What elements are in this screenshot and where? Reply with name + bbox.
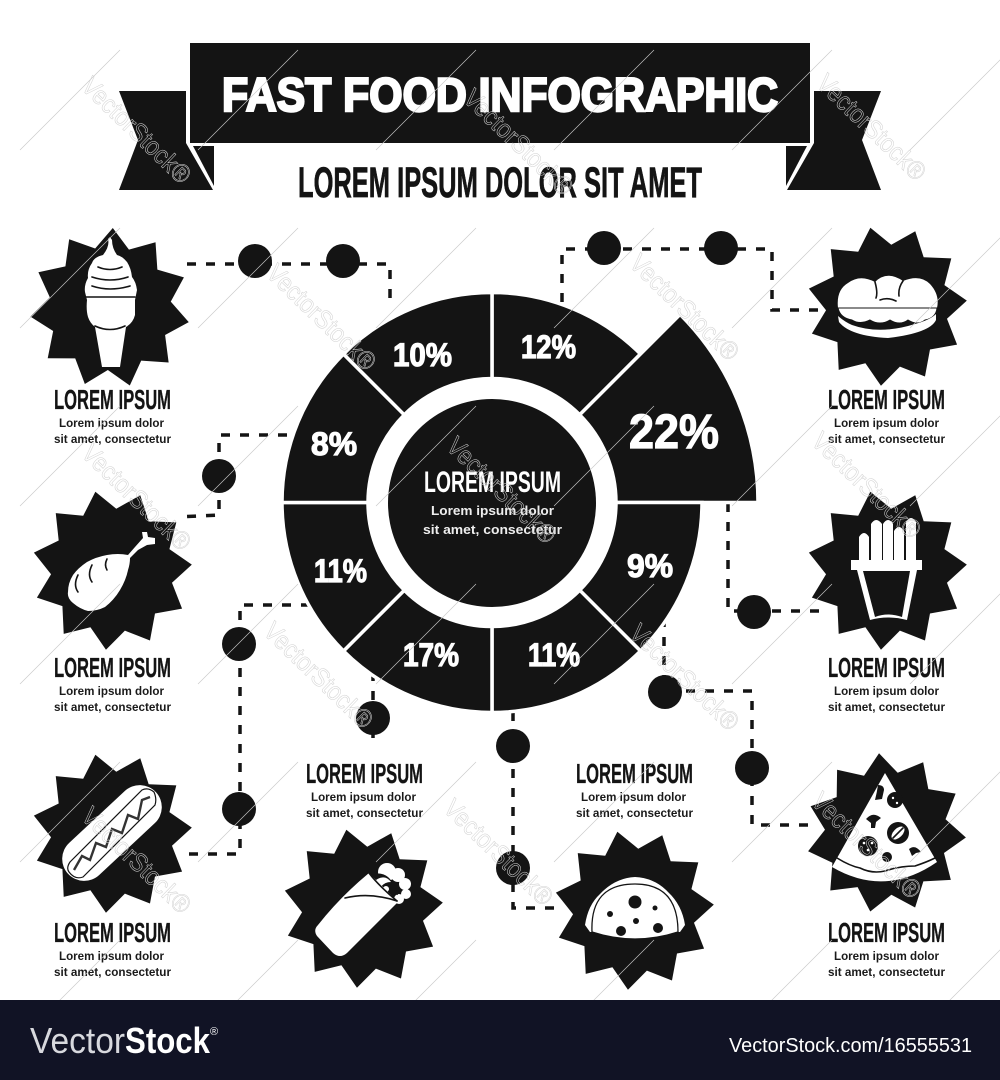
icon: taco (585, 877, 685, 939)
percent labels (311, 329, 719, 673)
footer bar (0, 1000, 1000, 1080)
watermark: VectorStock® (624, 618, 745, 737)
star badge (18, 738, 205, 925)
percent labels: 8% (311, 426, 357, 462)
item: fries (793, 475, 980, 714)
watermark: VectorStock® (76, 71, 197, 190)
connector dots (202, 231, 771, 885)
label (828, 917, 945, 979)
watermark: VectorStock® (624, 248, 745, 367)
icon: drumstick (68, 532, 155, 611)
label: Lorem ipsum dolor (834, 949, 939, 963)
label: LOREM IPSUM (54, 384, 171, 415)
segment 8% (282, 354, 404, 502)
label: Lorem ipsum dolor (311, 790, 416, 804)
star badge (540, 815, 727, 1002)
ribbon right tail (787, 91, 881, 190)
icon: sandwich (838, 276, 938, 338)
label: LOREM IPSUM (54, 917, 171, 948)
label: LOREM IPSUM (576, 758, 693, 789)
icon: ice cream cone (85, 237, 137, 367)
label: sit amet, consectetur (54, 965, 171, 979)
segment 9% (580, 502, 702, 651)
center text: sit amet, consectetur (423, 523, 562, 537)
watermark: VectorStock® (806, 786, 927, 905)
item: hot dog (18, 738, 205, 979)
watermark: VectorStock® (438, 793, 559, 912)
star badge (18, 475, 205, 662)
label (828, 652, 945, 714)
label: sit amet, consectetur (576, 806, 693, 820)
footer url: VectorStock.com/16555531 (729, 1035, 972, 1057)
percent labels: 10% (393, 337, 452, 373)
pie chart (282, 292, 758, 712)
item: chicken leg (18, 475, 205, 714)
watermark: VectorStock® (261, 258, 382, 377)
label (54, 384, 171, 446)
label (54, 652, 171, 714)
segment 12% (492, 292, 640, 415)
ribbon main band (190, 43, 810, 143)
connector lines (178, 249, 828, 908)
watermark: VectorStock® (258, 616, 379, 735)
center text: Lorem ipsum dolor (431, 504, 554, 518)
icon: hot dog (53, 776, 171, 890)
star badge (269, 813, 456, 1000)
subtitle: LOREM IPSUM DOLOR SIT AMET (298, 159, 702, 207)
star badge (793, 475, 980, 662)
title banner (119, 43, 881, 190)
ribbon left tail (119, 91, 213, 190)
label: Lorem ipsum dolor (581, 790, 686, 804)
star badge (800, 746, 972, 916)
segment 11% bottom (492, 590, 640, 712)
label: LOREM IPSUM (54, 652, 171, 683)
center text (423, 466, 562, 537)
segment 10% (344, 292, 492, 415)
label: Lorem ipsum dolor (59, 949, 164, 963)
item: sandwich (793, 211, 980, 446)
ribbon right fold (786, 146, 807, 186)
item: taco (540, 758, 727, 1002)
label: sit amet, consectetur (54, 700, 171, 714)
label (576, 758, 693, 820)
percent labels: 11% (528, 637, 580, 673)
label (306, 758, 423, 820)
label: sit amet, consectetur (306, 806, 423, 820)
segment 11% left (282, 502, 404, 651)
percent labels: 12% (521, 329, 576, 365)
icon: french fries (851, 518, 922, 620)
label: sit amet, consectetur (54, 432, 171, 446)
watermark: VectorStock® (76, 438, 197, 557)
percent labels: 11% (314, 553, 367, 589)
segment 17% (344, 590, 492, 712)
label: Lorem ipsum dolor (834, 416, 939, 430)
watermark: VectorStock® (458, 83, 579, 202)
footer logo: VectorStock (30, 1020, 223, 1061)
watermark: VectorStock® (76, 801, 197, 920)
center disc (388, 399, 596, 607)
label (54, 917, 171, 979)
label: LOREM IPSUM (306, 758, 423, 789)
star badge (793, 211, 980, 398)
icon: pizza slice (832, 773, 937, 881)
icon: burrito wrap (315, 863, 411, 956)
label (828, 384, 945, 446)
star badge (28, 225, 192, 388)
label: Lorem ipsum dolor (59, 416, 164, 430)
watermark: VectorStock® (441, 431, 562, 550)
item: pizza (800, 746, 972, 979)
title: FAST FOOD INFOGRAPHIC (222, 68, 778, 121)
label: Lorem ipsum dolor (834, 684, 939, 698)
segment 22% (580, 314, 758, 502)
item: ice cream (28, 225, 192, 446)
ribbon left fold (193, 146, 214, 186)
percent labels: 22% (629, 406, 719, 459)
percent labels: 17% (403, 637, 459, 673)
percent labels: 9% (627, 548, 673, 584)
footer logo: ® (210, 1026, 218, 1038)
label: Lorem ipsum dolor (59, 684, 164, 698)
watermark: VectorStock® (811, 68, 932, 187)
label: sit amet, consectetur (828, 965, 945, 979)
label: sit amet, consectetur (828, 700, 945, 714)
item: burrito (269, 758, 456, 1000)
center text: LOREM IPSUM (424, 466, 561, 499)
watermark: VectorStock® (806, 426, 927, 545)
label: sit amet, consectetur (828, 432, 945, 446)
